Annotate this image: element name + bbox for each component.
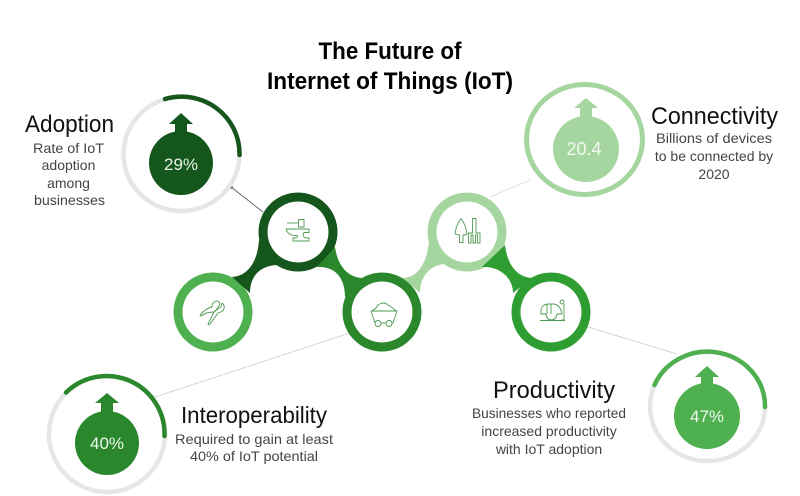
ring: anvil [258,192,338,272]
leader line: connectivity [490,180,530,197]
panel: interoperability gauge: 40% [90,434,124,453]
icon: mine cart [371,303,397,326]
text: adoption description: adoption [42,157,95,173]
title: Internet of Things (IoT) [267,68,513,95]
panel: adoption gauge [124,97,240,211]
text: connectivity description: 2020 [698,166,730,182]
heading: interoperability: Interoperability [181,402,327,428]
panel: connectivity gauge [526,84,642,194]
panel: productivity gauge [650,352,765,461]
ring holes [182,202,582,342]
leader line: productivity [585,326,677,354]
ring: pliers [174,272,252,352]
leader line: interoperability [155,333,350,397]
text: productivity description: increased productivity [481,423,617,439]
connector: anvil to pliers [232,240,277,293]
text: interoperability description: Required to gain at least [175,431,333,447]
title: The Future of [318,38,462,65]
text: connectivity description: to be connected by [655,148,773,164]
icon: trowel and fork [455,218,480,243]
text: adoption description: Rate of IoT [33,140,104,156]
icon: machine [540,300,565,320]
text: adoption description: among [47,175,90,191]
text: connectivity description [655,130,773,182]
text: productivity description: with IoT adoption [495,441,602,457]
text: adoption description: businesses [34,192,105,208]
ring: garden tools [428,192,506,272]
panel: connectivity gauge: 20.4 [566,139,602,159]
heading: adoption: Adoption [25,111,114,138]
connector: garden tools to machine [482,245,532,293]
connector: anvil to cart [317,247,362,297]
network of connected rings [174,192,590,352]
text: productivity description: Businesses who reported [472,405,626,421]
connector: cart to garden tools [403,242,444,293]
heading: productivity: Productivity [493,377,615,404]
icon: anvil [286,220,309,241]
text: interoperability description: 40% of IoT potential [190,448,318,464]
text: productivity description [472,405,626,457]
panel: productivity gauge: 47% [690,407,724,426]
text: connectivity description: Billions of devices [656,130,772,146]
text: adoption description [33,140,105,208]
title [267,38,513,95]
ring: machine [512,272,590,352]
heading: connectivity: Connectivity [651,103,778,130]
ring: mine cart [342,272,422,352]
panel: interoperability gauge [49,376,165,492]
panel: adoption gauge: 29% [164,155,198,174]
icon: pliers [200,301,224,325]
text: interoperability description [175,431,333,464]
leader line: adoption [229,185,263,212]
